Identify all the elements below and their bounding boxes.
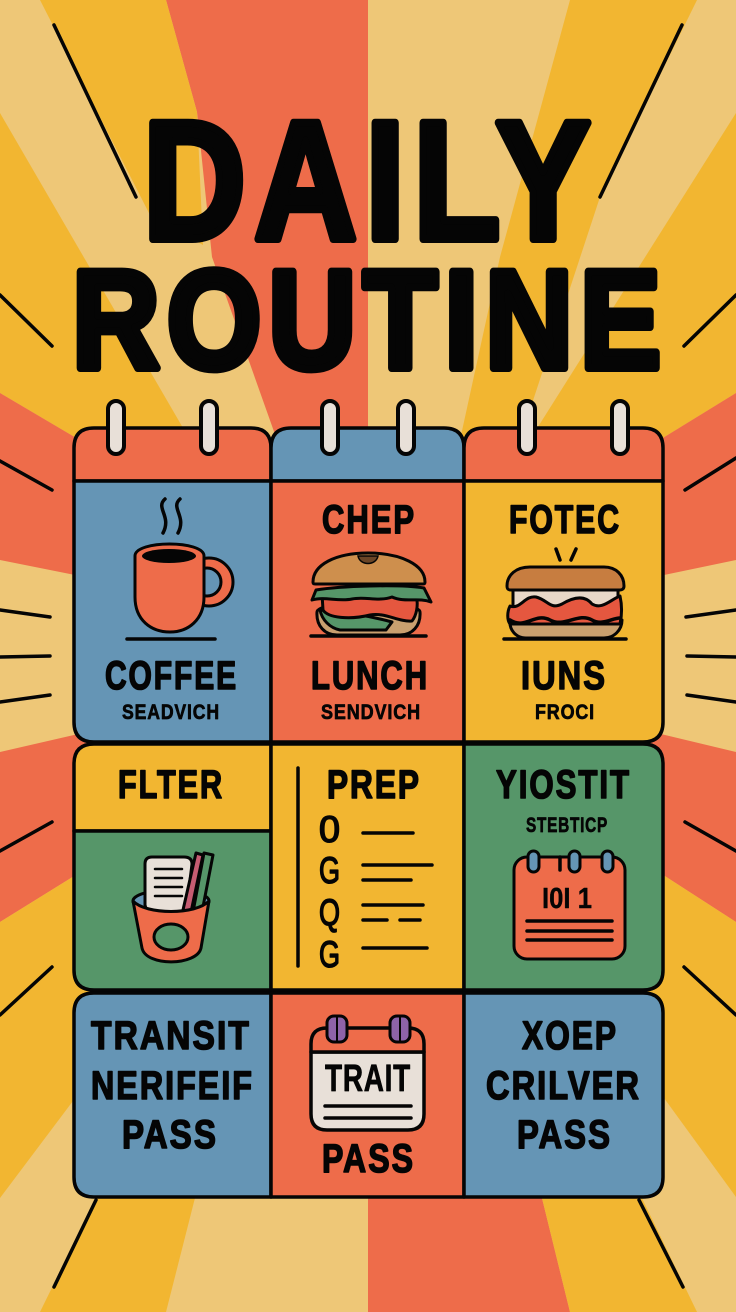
sublabel: stebticp: STEBTICP [526, 814, 608, 837]
checklist: 0 [319, 809, 340, 850]
label: crilver lines: PASS [517, 1113, 612, 1157]
panel: trait [271, 993, 464, 1197]
icon: trait calendar: TRAIT [325, 1058, 411, 1100]
checklist: G [319, 934, 340, 975]
icon: trait calendar [311, 1016, 424, 1130]
label: transit lines [91, 1014, 254, 1157]
checklist: G [319, 850, 340, 891]
icon: burger [311, 553, 431, 636]
panel: transit [74, 993, 271, 1197]
title: DAILY [143, 86, 599, 275]
label: coffee: COFFEE [105, 654, 238, 698]
label: crilver lines [486, 1014, 641, 1157]
label: lunch: LUNCH [311, 654, 429, 698]
heading: yiostit: YIOSTIT [496, 763, 631, 807]
icon: coffee mug [127, 499, 233, 639]
label: transit lines: TRANSIT [91, 1014, 251, 1058]
panel: filter [74, 744, 271, 990]
icon: cup with paper and pens [133, 853, 213, 962]
label: transit lines: NERIFEIF [91, 1064, 254, 1108]
panel: crilver [464, 993, 663, 1197]
heading: chep: CHEP [322, 498, 416, 542]
panel: prep [271, 744, 464, 990]
label: pass: PASS [322, 1137, 415, 1181]
panel: yiostit [464, 744, 663, 990]
label: crilver lines: XOEP [522, 1014, 618, 1058]
label: transit lines: PASS [122, 1113, 218, 1157]
calendar grid [74, 401, 663, 1197]
heading: fotec: FOTEC [509, 498, 621, 542]
panel: coffee [74, 481, 271, 742]
icon: sandwich [504, 549, 626, 639]
heading: flter: FLTER [118, 763, 224, 807]
checklist [298, 768, 432, 975]
sublabel: seadvich: SEADVICH [122, 701, 220, 724]
sublabel: froci: FROCI [535, 701, 595, 724]
heading: prep: PREP [327, 763, 421, 807]
label: crilver lines: CRILVER [486, 1064, 641, 1108]
panel: iuns [464, 481, 663, 742]
icon: small calendar [514, 851, 625, 959]
sublabel: sendvich: SENDVICH [321, 701, 421, 724]
checklist: Q [319, 892, 340, 933]
calendar header row [74, 401, 663, 481]
icon: small calendar: I0I 1 [542, 883, 592, 915]
panel: lunch [271, 481, 464, 742]
label: iuns: IUNS [521, 654, 607, 698]
title [72, 86, 668, 398]
